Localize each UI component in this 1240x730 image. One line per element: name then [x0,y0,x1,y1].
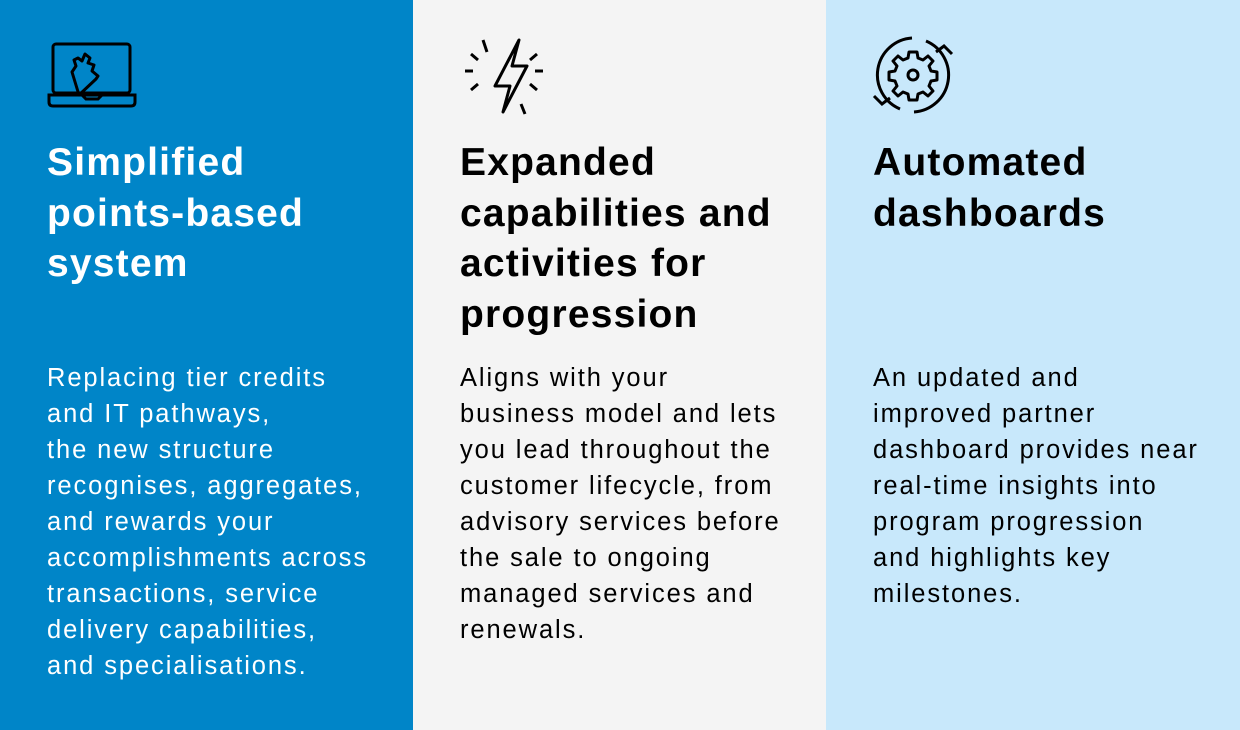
title [47,141,304,285]
panel: expanded capabilities [413,0,826,730]
body text: improved partner [873,400,1096,428]
body text: customer lifecycle, from [460,472,773,500]
body text: and highlights key [873,544,1111,572]
body text: recognises, aggregates, [47,472,363,500]
body text: accomplishments across [47,544,368,572]
title: capabilities and [460,192,772,234]
title: progression [460,292,699,336]
body text [47,364,368,680]
body text: Aligns with your [460,364,669,392]
body text: advisory services before [460,508,781,536]
title: points-based [47,192,304,234]
panel: simplified points-based system [0,0,413,730]
title: activities for [460,242,707,285]
title: system [47,242,189,285]
title: dashboards [873,192,1106,234]
body text: program progression [873,508,1144,536]
panel: automated dashboards [826,0,1240,730]
body text: you lead throughout the [460,436,772,464]
body text [460,364,781,644]
body text: Replacing tier credits [47,364,327,392]
body text: the sale to ongoing [460,544,712,572]
body text: and IT pathways, [47,400,271,428]
body text: transactions, service [47,580,319,608]
icon: lightning bolt [465,38,543,114]
title: Simplified [47,141,245,184]
body text: delivery capabilities, [47,616,317,644]
body text: and rewards your [47,508,274,536]
title: Expanded [460,141,656,184]
body text: milestones. [873,580,1023,608]
body text: the new structure [47,436,275,464]
body text: real-time insights into [873,472,1158,500]
icon: gear with cycle arrows [873,36,953,114]
body text: renewals. [460,616,586,644]
body text: An updated and [873,364,1080,392]
title: Automated [873,141,1087,184]
title [873,141,1106,234]
body text: managed services and [460,580,755,608]
body text: and specialisations. [47,652,308,680]
body text [873,364,1199,608]
icon: laptop with puzzle [48,42,136,108]
title [460,141,772,336]
body text: business model and lets [460,400,777,428]
body text: dashboard provides near [873,436,1199,464]
